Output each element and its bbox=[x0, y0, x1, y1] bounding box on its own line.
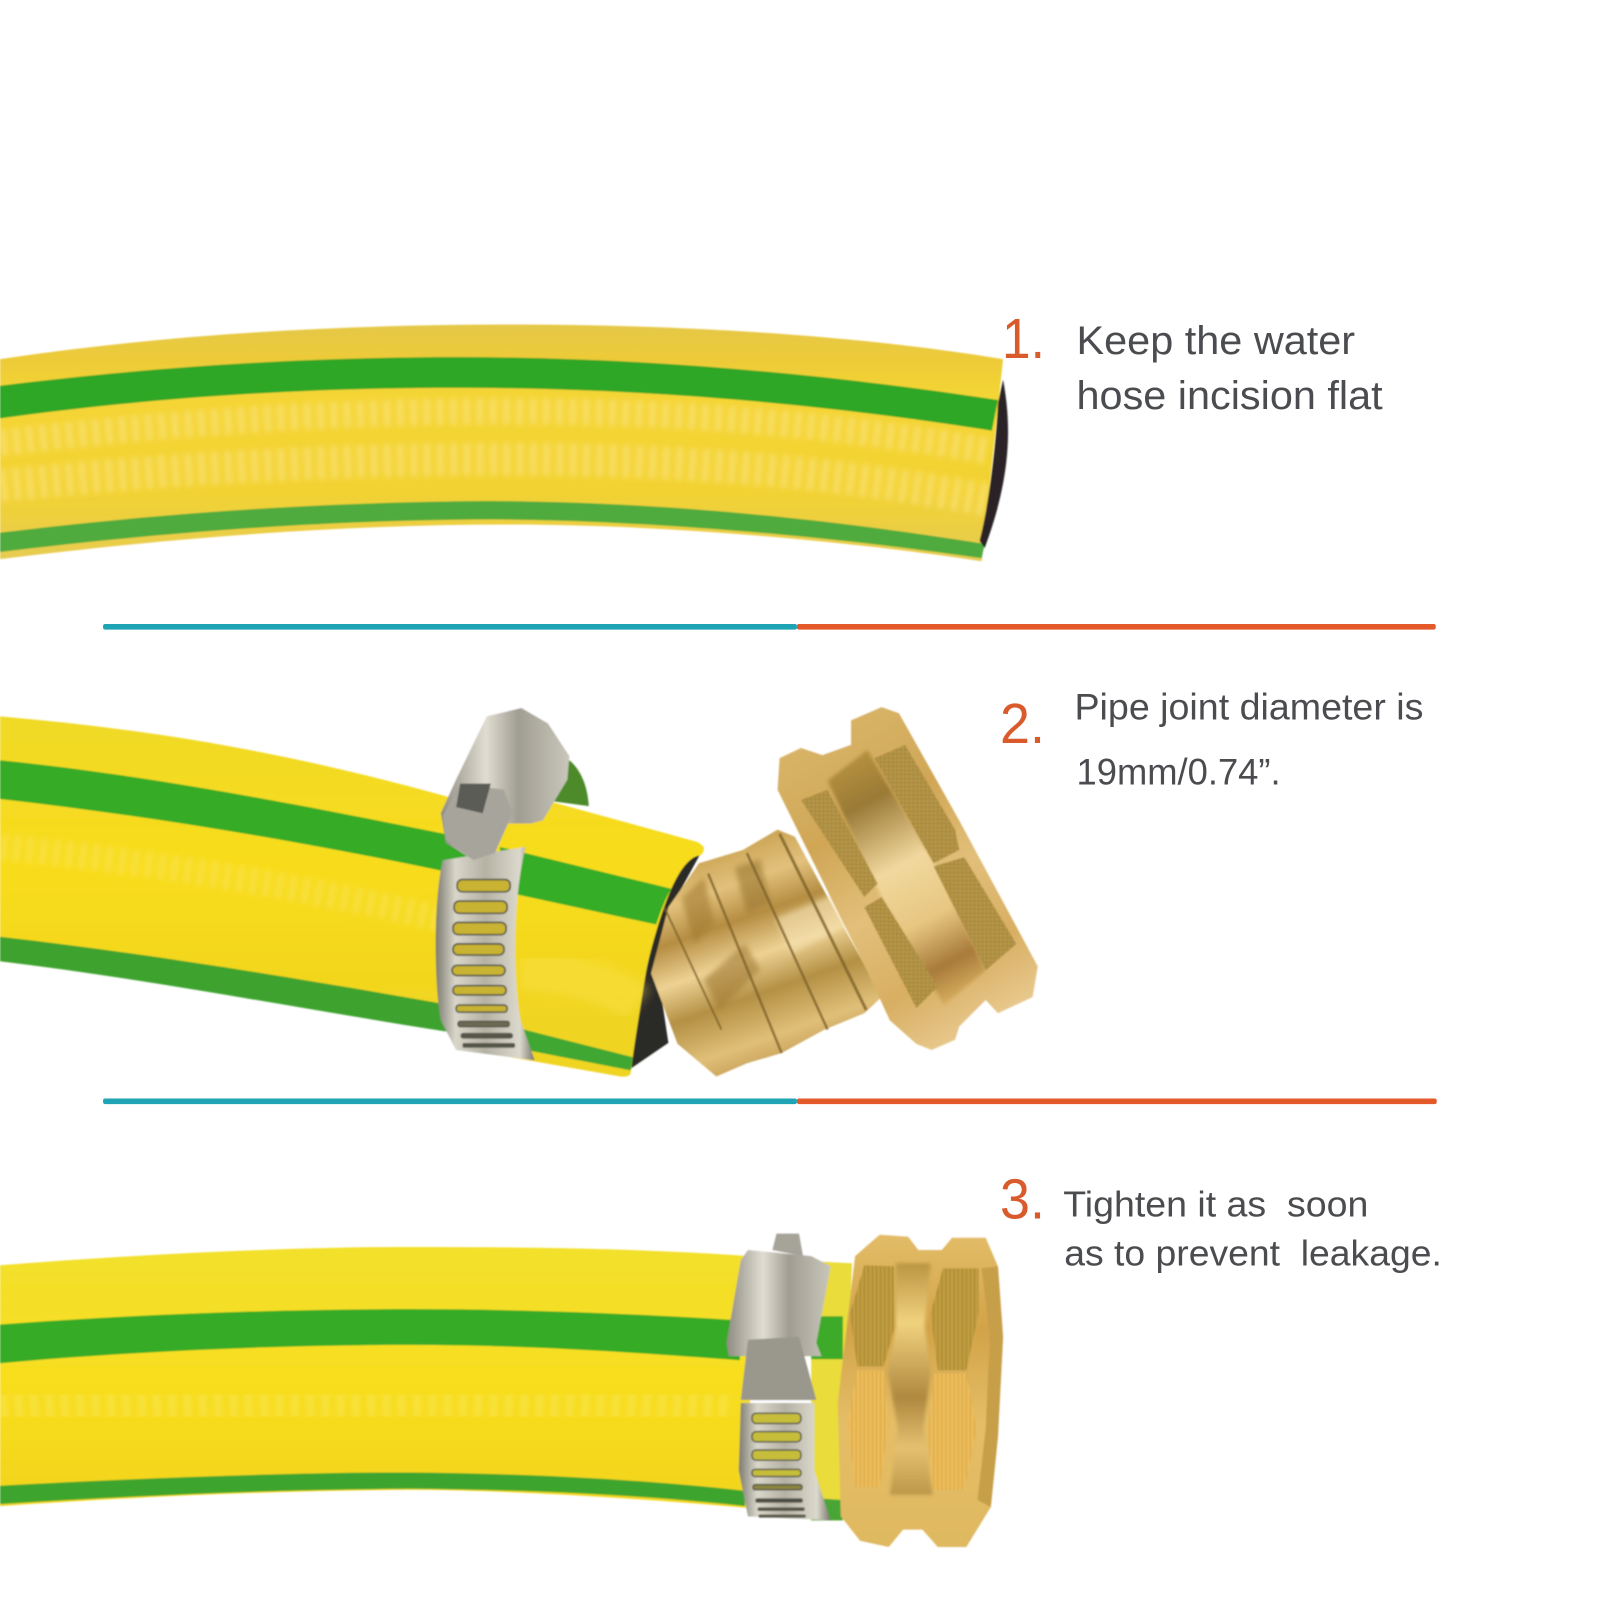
hose gap by nut bbox=[811, 1261, 852, 1520]
woven texture highlights bbox=[0, 411, 990, 500]
hose body bbox=[0, 1247, 750, 1508]
clamp screw head bbox=[443, 784, 512, 860]
dark hose opening bbox=[980, 380, 1008, 548]
brass barb bbox=[651, 830, 882, 1077]
clamp housing bbox=[441, 708, 569, 860]
knurled facets bbox=[801, 790, 878, 897]
instruction 3: as to prevent leakage. bbox=[1064, 1233, 1442, 1273]
instruction 2: Pipe joint diameter is bbox=[1074, 686, 1423, 727]
texture highlight bbox=[0, 1398, 735, 1413]
hose main section bbox=[0, 716, 515, 1037]
clamp slots bbox=[752, 1413, 805, 1517]
hose end section bbox=[500, 799, 704, 1077]
number 1: 1. bbox=[1002, 307, 1045, 370]
upper green stripe bbox=[0, 357, 998, 431]
hidden green inside clamp bbox=[551, 760, 589, 806]
clamp housing bbox=[727, 1250, 831, 1356]
knurled facets bbox=[850, 1265, 894, 1366]
clamp band bbox=[436, 847, 535, 1060]
clamp screw head bbox=[741, 1337, 816, 1400]
upper green stripe bbox=[0, 1309, 740, 1363]
step 1 text bbox=[1002, 307, 1383, 418]
instruction 3 bbox=[1063, 1184, 1442, 1273]
brass hex nut bbox=[838, 1235, 1003, 1547]
clamp slots bbox=[452, 880, 514, 1047]
instruction 1 bbox=[1077, 319, 1383, 418]
clamp band bbox=[739, 1403, 831, 1520]
neck between hex rings bbox=[828, 750, 986, 1005]
number 2: 2. bbox=[1000, 692, 1045, 755]
barb shading spots bbox=[682, 859, 852, 1010]
step 3 text bbox=[1000, 1167, 1442, 1273]
photo: assembled hose with clamp and connector bbox=[0, 1234, 1003, 1547]
instruction 1: hose incision flat bbox=[1077, 374, 1383, 418]
instruction 2: 19mm/0.74”. bbox=[1077, 752, 1281, 793]
worm clamp bbox=[727, 1234, 831, 1520]
photo: hose, clamp and brass connector apart bbox=[0, 707, 1038, 1077]
neck between hex rings bbox=[888, 1263, 933, 1495]
hose body bbox=[0, 324, 1003, 561]
instruction 3: Tighten it as soon bbox=[1063, 1184, 1368, 1224]
number 3: 3. bbox=[1000, 1167, 1045, 1230]
clamp screw tip bbox=[772, 1234, 803, 1256]
dark hose opening bbox=[630, 847, 704, 1069]
lower green stripe bbox=[0, 1472, 745, 1506]
worm clamp bbox=[436, 708, 569, 1060]
right rim bbox=[978, 1266, 1003, 1507]
lower green stripe bbox=[0, 501, 985, 558]
brass hex nut bbox=[778, 707, 1038, 1050]
divider line 2 bbox=[103, 1098, 1437, 1104]
instruction 1: Keep the water bbox=[1077, 319, 1355, 363]
photo: cut yellow-green hose bbox=[0, 324, 1008, 561]
divider line 1 bbox=[103, 624, 1436, 630]
step 2 text bbox=[1000, 686, 1423, 793]
instruction 2 bbox=[1074, 686, 1423, 793]
